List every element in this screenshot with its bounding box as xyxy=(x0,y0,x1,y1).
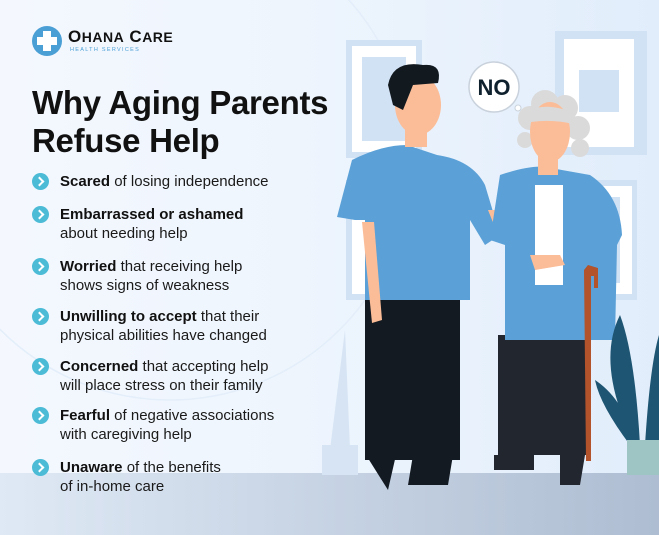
text: of in-home care xyxy=(60,478,164,495)
text: Concerned that accepting help xyxy=(60,358,268,375)
title: Why Aging Parents xyxy=(32,84,328,121)
text: shows signs of weakness xyxy=(60,277,229,294)
NO bubble: NO xyxy=(478,75,510,100)
bullet 5 xyxy=(32,358,268,394)
bullet 1 xyxy=(32,173,269,190)
bullet 7 xyxy=(32,459,221,495)
text: Unaware of the benefits xyxy=(60,459,221,476)
man xyxy=(337,64,513,490)
bullet 2 xyxy=(32,206,243,242)
plant left faint xyxy=(322,330,358,475)
text: Embarrassed or ashamed xyxy=(60,206,243,223)
logo: OHANA CARE xyxy=(68,27,173,46)
text: Unwilling to accept that their xyxy=(60,308,259,325)
NO bubble xyxy=(469,62,521,112)
bullet 3 xyxy=(32,258,242,294)
title: Refuse Help xyxy=(32,122,219,159)
text: about needing help xyxy=(60,225,188,242)
logo xyxy=(32,26,173,56)
text: Fearful of negative associations xyxy=(60,407,274,424)
text: Worried that receiving help xyxy=(60,258,242,275)
text: Scared of losing independence xyxy=(60,173,269,190)
title xyxy=(32,84,328,159)
bullet 4 xyxy=(32,308,267,344)
bullet 6 xyxy=(32,407,274,443)
text: physical abilities have changed xyxy=(60,327,267,344)
text: with caregiving help xyxy=(60,426,192,443)
plant right xyxy=(595,315,659,475)
logo: HEALTH SERVICES xyxy=(70,47,140,53)
text: will place stress on their family xyxy=(60,377,263,394)
picture frames xyxy=(346,31,647,300)
woman xyxy=(490,90,622,485)
